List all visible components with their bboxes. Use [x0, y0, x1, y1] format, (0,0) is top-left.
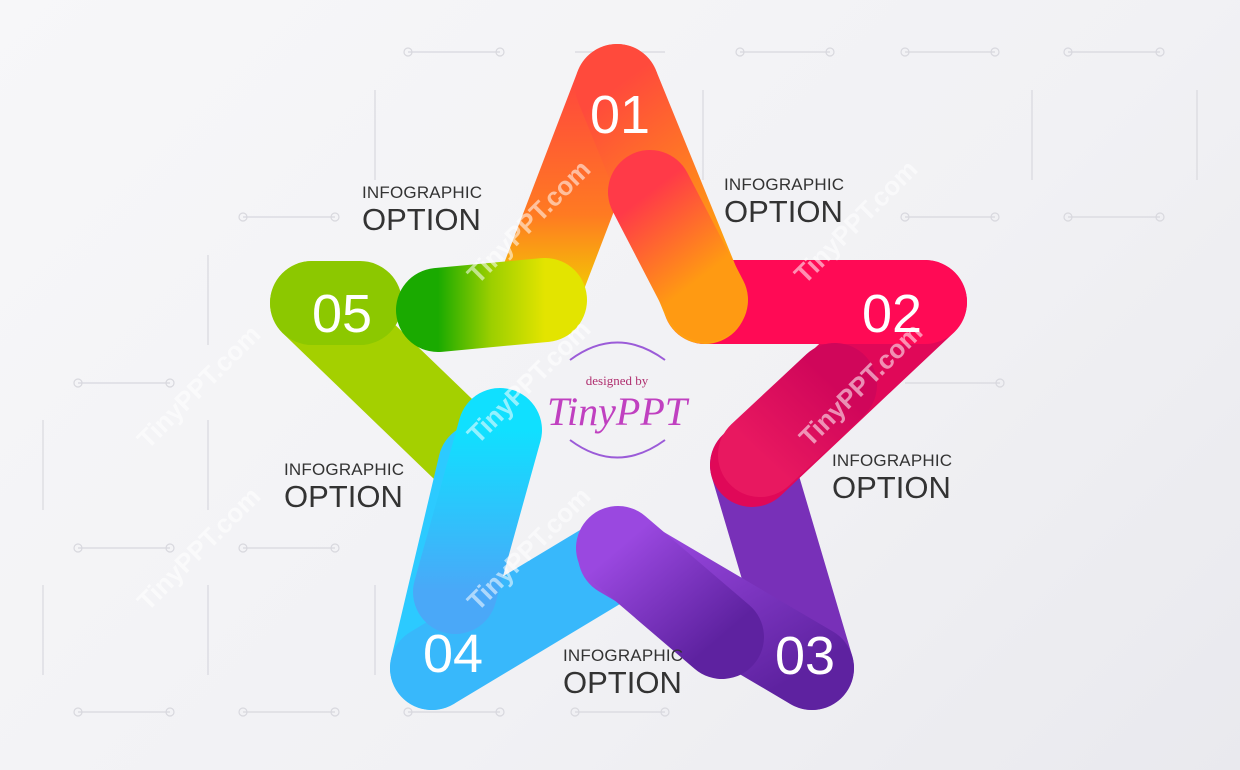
- label: bottom: OPTION: [563, 665, 682, 700]
- label: top-left: OPTION: [362, 202, 481, 237]
- watermarks: TinyPPT.com: [461, 481, 596, 616]
- numbers: 02: [862, 284, 922, 344]
- numbers: 03: [775, 626, 835, 686]
- arm segments: [535, 86, 617, 300]
- watermarks: TinyPPT.com: [461, 314, 596, 449]
- label: top-right: [724, 175, 844, 229]
- watermarks: TinyPPT.com: [131, 481, 266, 616]
- numbers: 04: [423, 624, 483, 684]
- label: bottom: INFOGRAPHIC: [563, 646, 683, 665]
- label: top-right: OPTION: [724, 194, 843, 229]
- label: top-left: INFOGRAPHIC: [362, 183, 482, 202]
- numbers: 05: [312, 284, 372, 344]
- label: left: OPTION: [284, 479, 403, 514]
- label: right: [832, 451, 952, 505]
- watermarks: TinyPPT.com: [788, 154, 923, 289]
- label: top-left: [362, 183, 482, 237]
- numbers: 01: [590, 85, 650, 145]
- label: left: [284, 460, 404, 514]
- label: bottom: [563, 646, 683, 700]
- center logo: designed by: [586, 373, 649, 388]
- center logo: TinyPPT: [547, 389, 690, 434]
- watermarks: [131, 154, 928, 616]
- label: left: INFOGRAPHIC: [284, 460, 404, 479]
- numbers: [312, 85, 922, 686]
- watermarks: TinyPPT.com: [793, 317, 928, 452]
- center logo: [547, 342, 690, 458]
- label: right: OPTION: [832, 470, 951, 505]
- watermarks: TinyPPT.com: [461, 154, 596, 289]
- label: top-right: INFOGRAPHIC: [724, 175, 844, 194]
- label: right: INFOGRAPHIC: [832, 451, 952, 470]
- watermarks: TinyPPT.com: [131, 319, 266, 454]
